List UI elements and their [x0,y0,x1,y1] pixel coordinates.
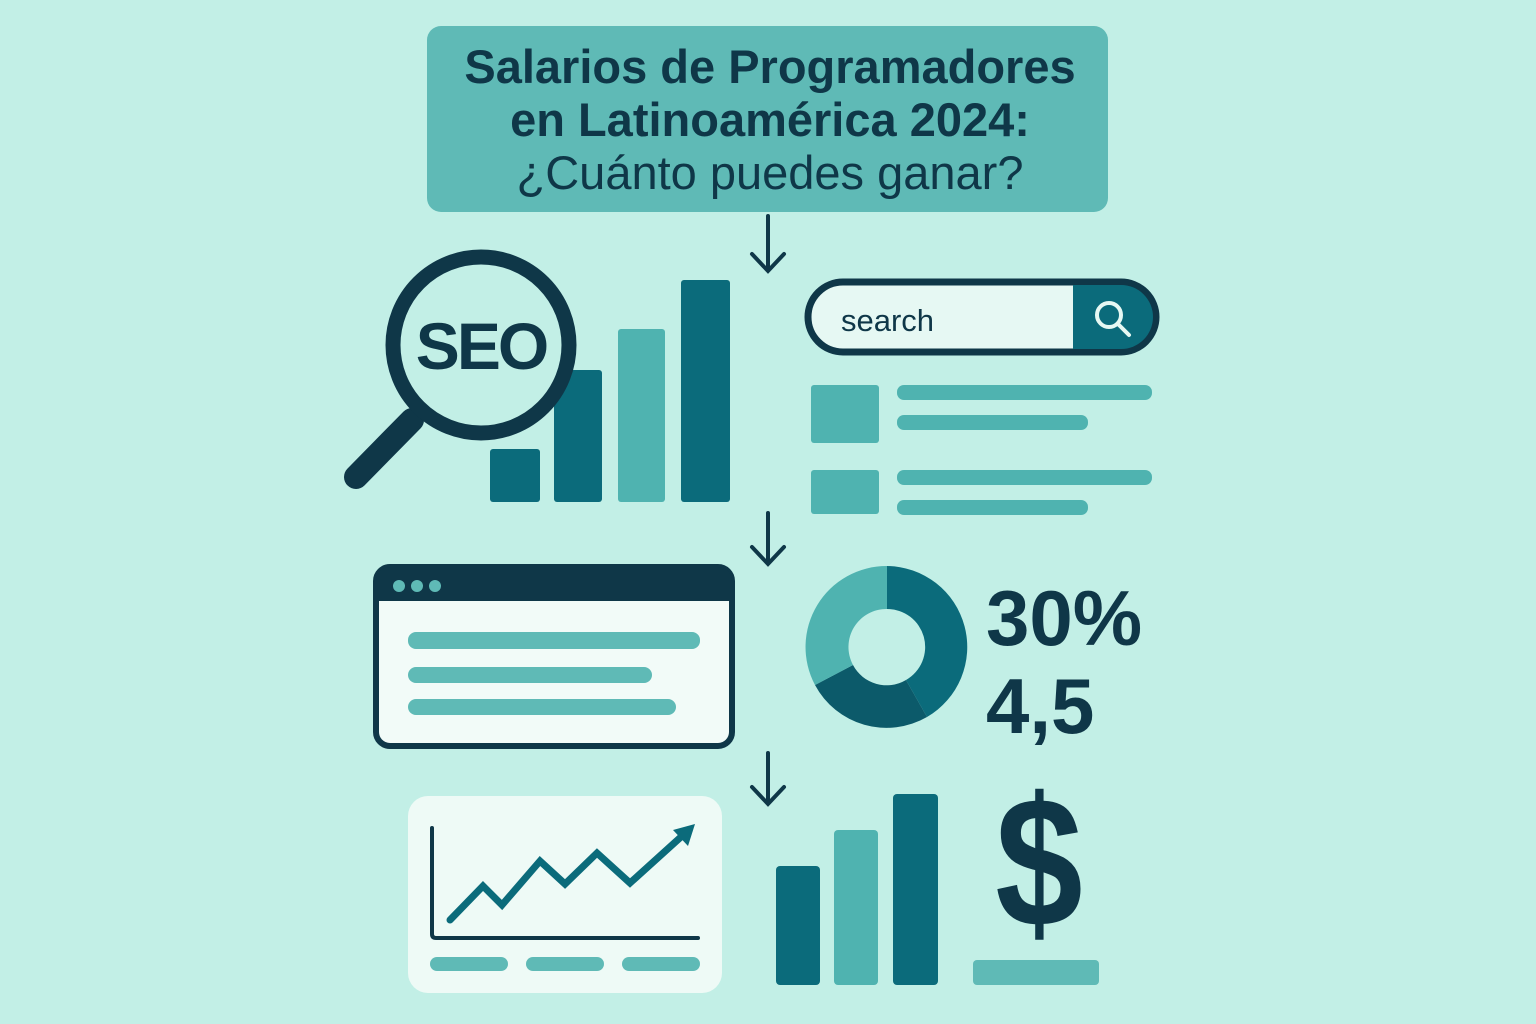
icon: SEO magnifier with bars: SEO [416,309,547,383]
title: Salarios de Programadores [464,40,1076,93]
title: ¿Cuánto puedes ganar? [517,146,1023,199]
search bar: search [841,303,934,338]
icon: SEO magnifier with bars [356,257,730,502]
icon: dollar: $ [995,760,1083,966]
icon: dollar [973,760,1099,985]
stats text: 30% [986,574,1142,662]
line chart card [408,796,722,993]
search results list [811,385,1152,515]
title: en Latinoamérica 2024: [510,93,1030,146]
stats text [986,574,1142,750]
bar chart [776,794,938,985]
browser window [376,567,732,746]
arrow 1 [752,216,784,271]
arrow 3 [752,753,784,804]
arrow 2 [752,513,784,564]
donut chart [806,566,967,728]
title [427,26,1108,212]
search bar [808,282,1156,352]
stats text: 4,5 [986,662,1094,750]
